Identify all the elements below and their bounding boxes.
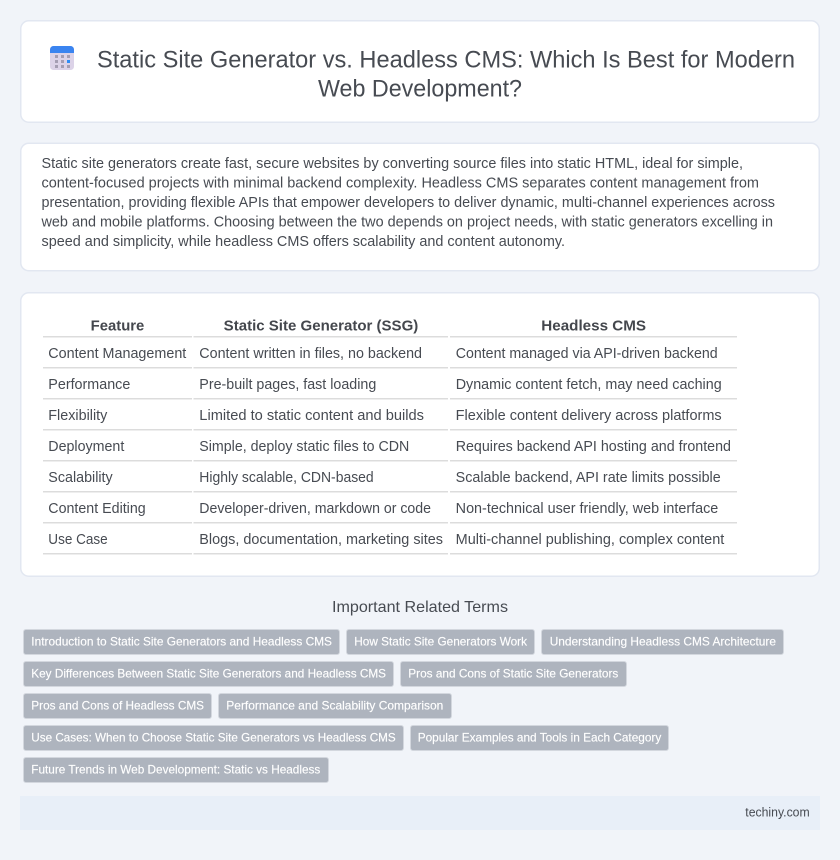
row: Use Case: Blogs, documentation, marketing sites <box>199 532 443 548</box>
title: Static Site Generator vs. Headless CMS: Which Is Best for Modern <box>97 46 795 74</box>
row: Flexibility <box>43 408 737 430</box>
footer: techiny.com <box>745 805 810 820</box>
table header row: Static Site Generator (SSG) <box>224 319 418 335</box>
tag <box>24 662 394 686</box>
row: Flexibility: Flexible content delivery across platforms <box>456 408 722 424</box>
row: Content Editing: Non-technical user friendly, web interface <box>456 501 718 517</box>
panel: intro text <box>21 143 819 271</box>
heading: important related terms: Important Related Terms <box>332 599 508 616</box>
row: Performance: Pre-built pages, fast loading <box>199 377 376 393</box>
table header row <box>43 319 737 338</box>
row: Scalability: Highly scalable, CDN-based <box>199 470 374 486</box>
tag <box>24 758 328 782</box>
row: Use Case: Use Case <box>48 532 108 548</box>
tag: Future Trends in Web Development: Static vs Headless <box>31 762 320 776</box>
row: Performance: Dynamic content fetch, may need caching <box>456 377 722 393</box>
tag: Pros and Cons of Headless CMS <box>31 698 204 712</box>
table header row: Feature <box>91 319 144 335</box>
header panel <box>21 21 819 122</box>
tag <box>542 630 784 654</box>
panel: related term tags <box>24 630 784 782</box>
row: Scalability: Scalability <box>48 470 114 486</box>
row: Content Editing <box>43 501 737 524</box>
title <box>97 46 795 102</box>
table header row: Headless CMS <box>541 319 646 335</box>
tag: Key Differences Between Static Site Generators and Headless CMS <box>31 666 386 680</box>
tag <box>410 726 668 750</box>
row: Scalability: Scalable backend, API rate limits possible <box>456 470 721 486</box>
tag <box>24 726 404 750</box>
tag: Performance and Scalability Comparison <box>226 698 443 712</box>
panel: comparison table <box>21 293 819 576</box>
intro paragraph <box>40 156 775 250</box>
row: Scalability <box>43 470 737 492</box>
row: Flexibility: Flexibility <box>48 408 108 424</box>
tag: Understanding Headless CMS Architecture <box>550 634 776 648</box>
row: Use Case: Multi-channel publishing, complex content <box>456 532 724 548</box>
row: Use Case <box>43 532 737 554</box>
row: Content Editing: Content Editing <box>48 501 146 517</box>
row: Content Management: Content Management <box>48 346 186 362</box>
tag: Popular Examples and Tools in Each Category <box>418 730 661 744</box>
tag: Pros and Cons of Static Site Generators <box>408 666 618 680</box>
tag <box>346 630 534 654</box>
intro paragraph: speed and simplicity, while headless CMS offers scalability and content autonomy. <box>42 234 565 250</box>
tag: Introduction to Static Site Generators and Headless CMS <box>31 634 332 648</box>
intro paragraph: presentation, providing flexible APIs that empower developers to deliver dynamic, multi-channel experiences across <box>42 195 775 211</box>
tag: How Static Site Generators Work <box>354 634 528 648</box>
intro paragraph: web and mobile platforms. Choosing between the two depends on project needs, with static generators excelling in <box>40 214 773 230</box>
row: Deployment <box>43 439 737 462</box>
row: Performance <box>43 377 737 400</box>
tag <box>218 694 452 718</box>
tag <box>400 662 626 686</box>
row: Content Management <box>43 346 737 368</box>
intro paragraph: content-focused projects with minimal backend complexity. Headless CMS separates content management from <box>42 176 759 192</box>
row: Content Management: Content written in files, no backend <box>199 346 422 362</box>
row: Content Management: Content managed via API-driven backend <box>456 346 718 362</box>
title: Web Development? <box>318 76 522 102</box>
row: Content Editing: Developer-driven, markdown or code <box>199 501 431 517</box>
intro paragraph: Static site generators create fast, secure websites by converting source files into static HTML, ideal for simple, <box>42 156 743 172</box>
row: Deployment: Deployment <box>48 439 124 455</box>
icon: calendar grid <box>50 46 74 70</box>
row: Flexibility: Limited to static content and builds <box>199 408 424 424</box>
row: Performance: Performance <box>48 377 130 393</box>
row: Deployment: Simple, deploy static files to CDN <box>199 439 409 455</box>
row: Deployment: Requires backend API hosting and frontend <box>456 439 731 455</box>
tag: Use Cases: When to Choose Static Site Generators vs Headless CMS <box>31 730 396 744</box>
footer <box>20 796 820 830</box>
tag <box>24 630 340 654</box>
tag <box>24 694 212 718</box>
